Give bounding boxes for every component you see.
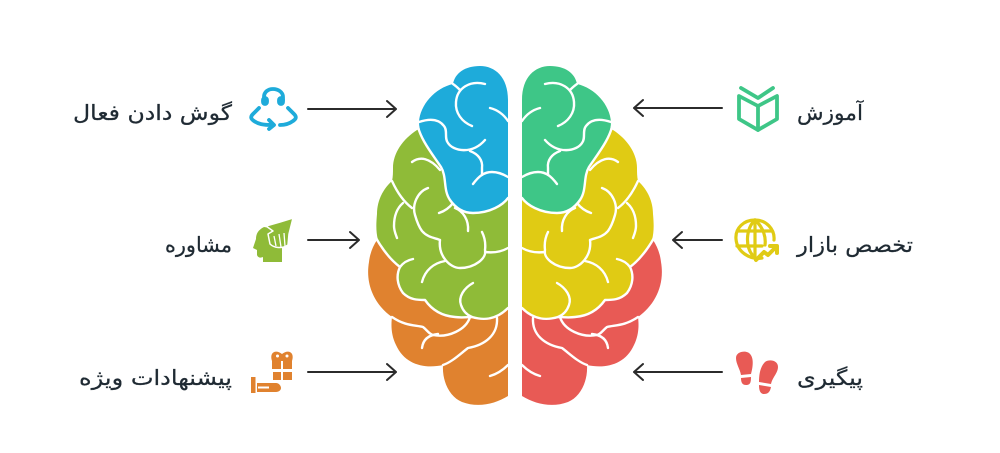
label: counselling: مشاوره	[165, 233, 232, 257]
lobe: green	[376, 120, 515, 319]
arrow: bottom right	[634, 364, 722, 380]
label: market expertise: تخصص بازار	[796, 233, 913, 257]
arrow: middle right	[673, 232, 722, 248]
arrow: middle left	[308, 232, 359, 248]
icon: head with hand	[253, 218, 293, 262]
lobe: blue	[417, 66, 515, 213]
arrow: bottom left	[308, 364, 396, 380]
lobe: teal	[515, 66, 613, 213]
brain	[368, 50, 662, 420]
label: special offers: پیشنهادات ویژه	[79, 366, 232, 390]
icon: footprints	[736, 352, 778, 394]
label: active listening: گوش دادن فعال	[73, 101, 232, 125]
label: education: آموزش	[797, 100, 864, 125]
label: follow-up: پیگیری	[797, 366, 863, 390]
icon: gift in hand	[251, 352, 293, 393]
icon: open book	[739, 88, 777, 130]
icon: headphones cycle	[251, 89, 296, 129]
left hemisphere	[368, 66, 515, 405]
lobe: orange	[368, 240, 515, 405]
arrow: top left	[308, 101, 396, 117]
right hemisphere	[515, 66, 662, 405]
lobe: yellow	[515, 120, 654, 319]
arrow: top right	[634, 100, 722, 116]
lobe: red	[515, 240, 662, 405]
icon: globe with rising arrow	[736, 220, 777, 260]
